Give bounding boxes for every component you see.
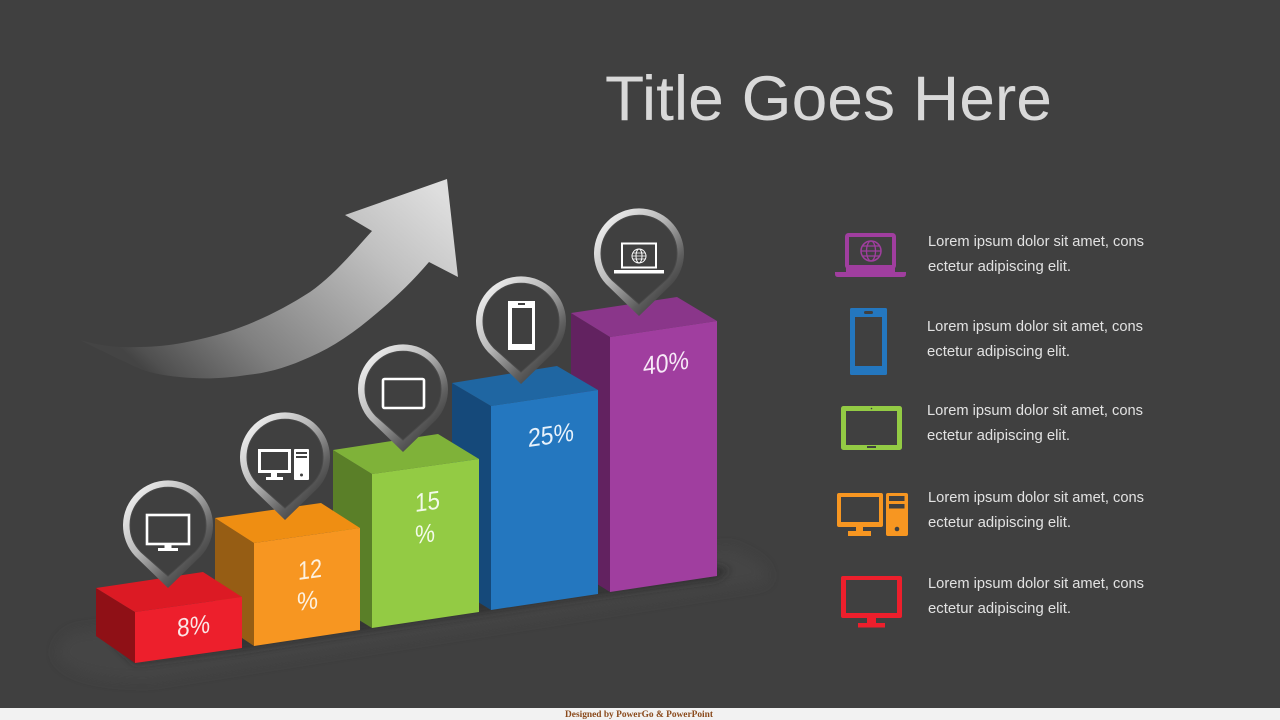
pin: smartphone [476,276,566,384]
title: Title Goes Here [605,64,1052,134]
ground shadow [58,548,767,680]
legend: tablet [841,402,1143,450]
legend text: Lorem ipsum dolor sit amet, cons [927,318,1143,335]
legend: laptop [835,233,1144,277]
value: 25%: 25% [528,417,574,453]
value: 40%: 40% [643,345,689,381]
value: 15%: 15 [415,485,440,518]
value: 12%: % [297,584,318,617]
icon: red monitor [841,576,902,628]
icon: purple laptop [835,235,906,277]
icon: green tablet [841,406,902,450]
bar: 8% red [96,572,242,663]
icon: blue smartphone [850,308,887,375]
legend text: ectetur adipiscing elit. [928,514,1071,531]
icon: tablet [383,379,424,408]
legend text: ectetur adipiscing elit. [928,258,1071,275]
icon: smartphone [508,301,535,350]
legend: monitor [841,575,1144,628]
footer strip [0,708,1280,720]
legend text [928,489,1144,531]
icon: laptop [614,244,664,274]
legend text: Lorem ipsum dolor sit amet, cons [927,402,1143,419]
legend text: Lorem ipsum dolor sit amet, cons [928,233,1144,250]
value: 8%: 8% [177,608,210,643]
icon: desktop computer [260,449,309,480]
pin: monitor [123,480,213,588]
legend text: ectetur adipiscing elit. [927,343,1070,360]
pin: tablet [358,344,448,452]
bar: 12% orange [215,503,360,646]
value: 15%: % [415,517,435,550]
legend: desktop computer [837,489,1144,536]
bar: 15% green [333,434,479,628]
value: 12%: 12 [298,553,322,586]
legend text: ectetur adipiscing elit. [927,427,1070,444]
footer credit: Designed by PowerGo & PowerPoint [565,709,713,719]
pin: desktop computer [240,412,330,520]
growth arrow [80,179,458,378]
pin: laptop [594,208,684,316]
icon: orange desktop computer [837,493,908,536]
legend: smartphone [850,308,1143,375]
legend text [928,575,1144,617]
legend text [927,402,1143,444]
legend text [927,318,1143,360]
value: 12% [297,553,322,617]
bar: 40% purple [571,297,717,592]
bar: 25% blue [452,366,598,610]
value: 15% [415,485,440,550]
legend text: ectetur adipiscing elit. [928,600,1071,617]
legend text [928,233,1144,275]
legend text: Lorem ipsum dolor sit amet, cons [928,575,1144,592]
legend text: Lorem ipsum dolor sit amet, cons [928,489,1144,506]
icon: monitor [147,515,189,551]
